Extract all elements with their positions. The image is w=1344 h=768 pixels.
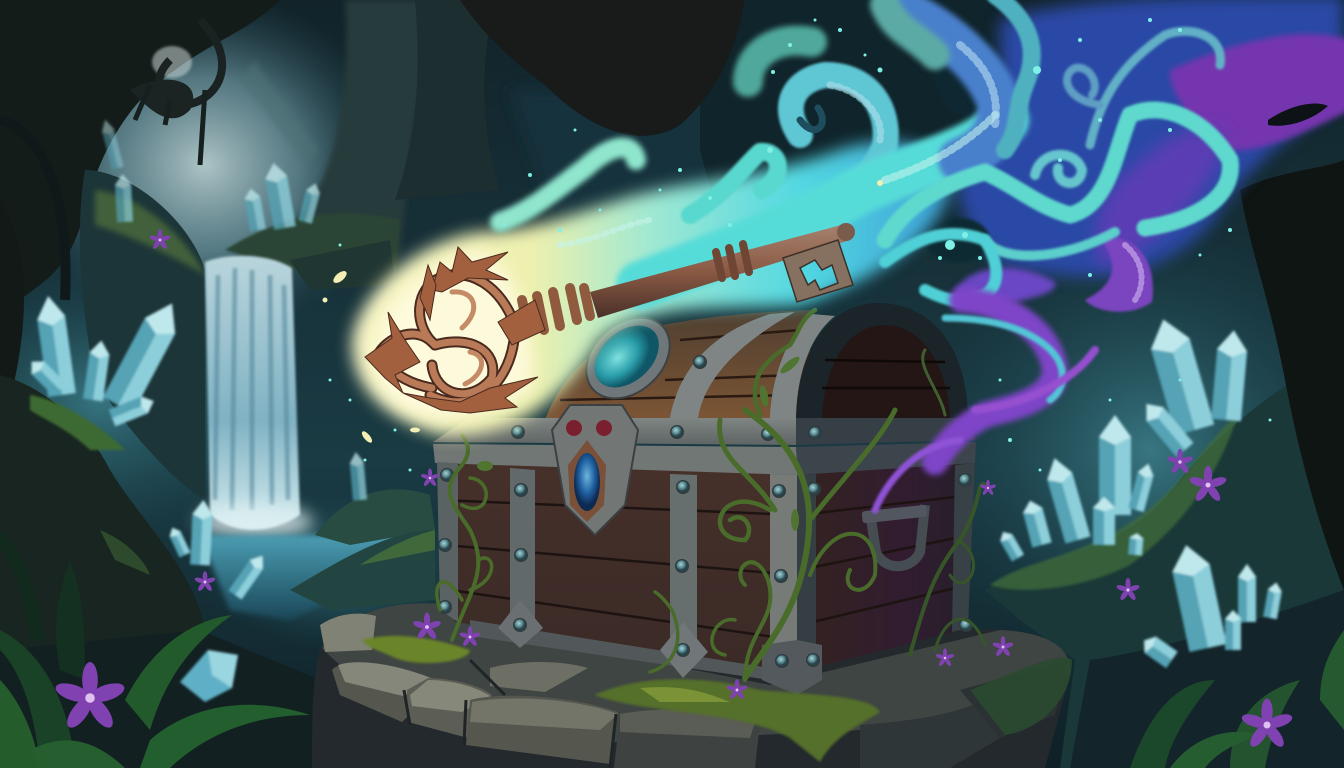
ribbon: lower flow (885, 110, 1230, 240)
ribbon: cyan lower loop (885, 234, 996, 300)
ribbon: blue rune arc (905, 12, 999, 160)
bottom rail (470, 620, 770, 680)
pedestal blocks (320, 614, 376, 652)
key collar rings (716, 244, 749, 278)
ribbon: upper-left blob (748, 41, 812, 82)
chest side planks (797, 462, 975, 672)
mossy banks (0, 375, 435, 768)
rivets (513, 618, 527, 632)
pool (200, 535, 400, 620)
vines on chest (437, 310, 990, 680)
crystal clusters (25, 118, 1283, 702)
ribbon: purple strand (935, 300, 1055, 462)
key shaft (590, 224, 850, 318)
dark pockets between ribbons (930, 53, 978, 116)
hasp plate (552, 405, 638, 535)
ribbon: second left swirl (690, 152, 778, 215)
key neck rings (522, 288, 590, 332)
ribbon: small left swirl (500, 148, 636, 222)
moss and small flowers (362, 468, 1072, 762)
rune bands (885, 115, 995, 180)
key bow (378, 275, 515, 402)
magic swirl: teal ribbons (500, 0, 1230, 510)
chest latch ring (870, 505, 925, 566)
metal bands (433, 418, 796, 445)
key (365, 223, 855, 413)
ribbon: main curl (791, 75, 886, 205)
foreground plants (0, 229, 1344, 768)
dark canopy overhead (0, 0, 745, 420)
sparkles and particles (328, 18, 1272, 472)
golden petals (322, 180, 883, 444)
corner plates (498, 600, 543, 648)
lid strap inner (670, 312, 795, 418)
magic swirl: blue and purple body (926, 0, 1344, 312)
vertical straps (510, 468, 535, 625)
chest front planks (437, 462, 797, 672)
lid strap outer (770, 314, 835, 422)
waterfall (197, 256, 313, 540)
lid dome end (796, 303, 968, 422)
pedestal top (322, 603, 1070, 742)
chest body (433, 301, 976, 695)
ribbon: small curl (1035, 155, 1082, 183)
waterfall cliff (80, 170, 400, 500)
ribbon: main stem (640, 120, 1005, 285)
ribbon: top curls (1090, 31, 1220, 145)
key bit (783, 240, 853, 302)
stone pedestal (312, 603, 1070, 768)
distant trees and trunks (225, 0, 1000, 300)
key glow (352, 142, 951, 435)
right bank and tree (985, 160, 1344, 768)
lid gem (570, 301, 686, 415)
lid wood (545, 310, 810, 420)
